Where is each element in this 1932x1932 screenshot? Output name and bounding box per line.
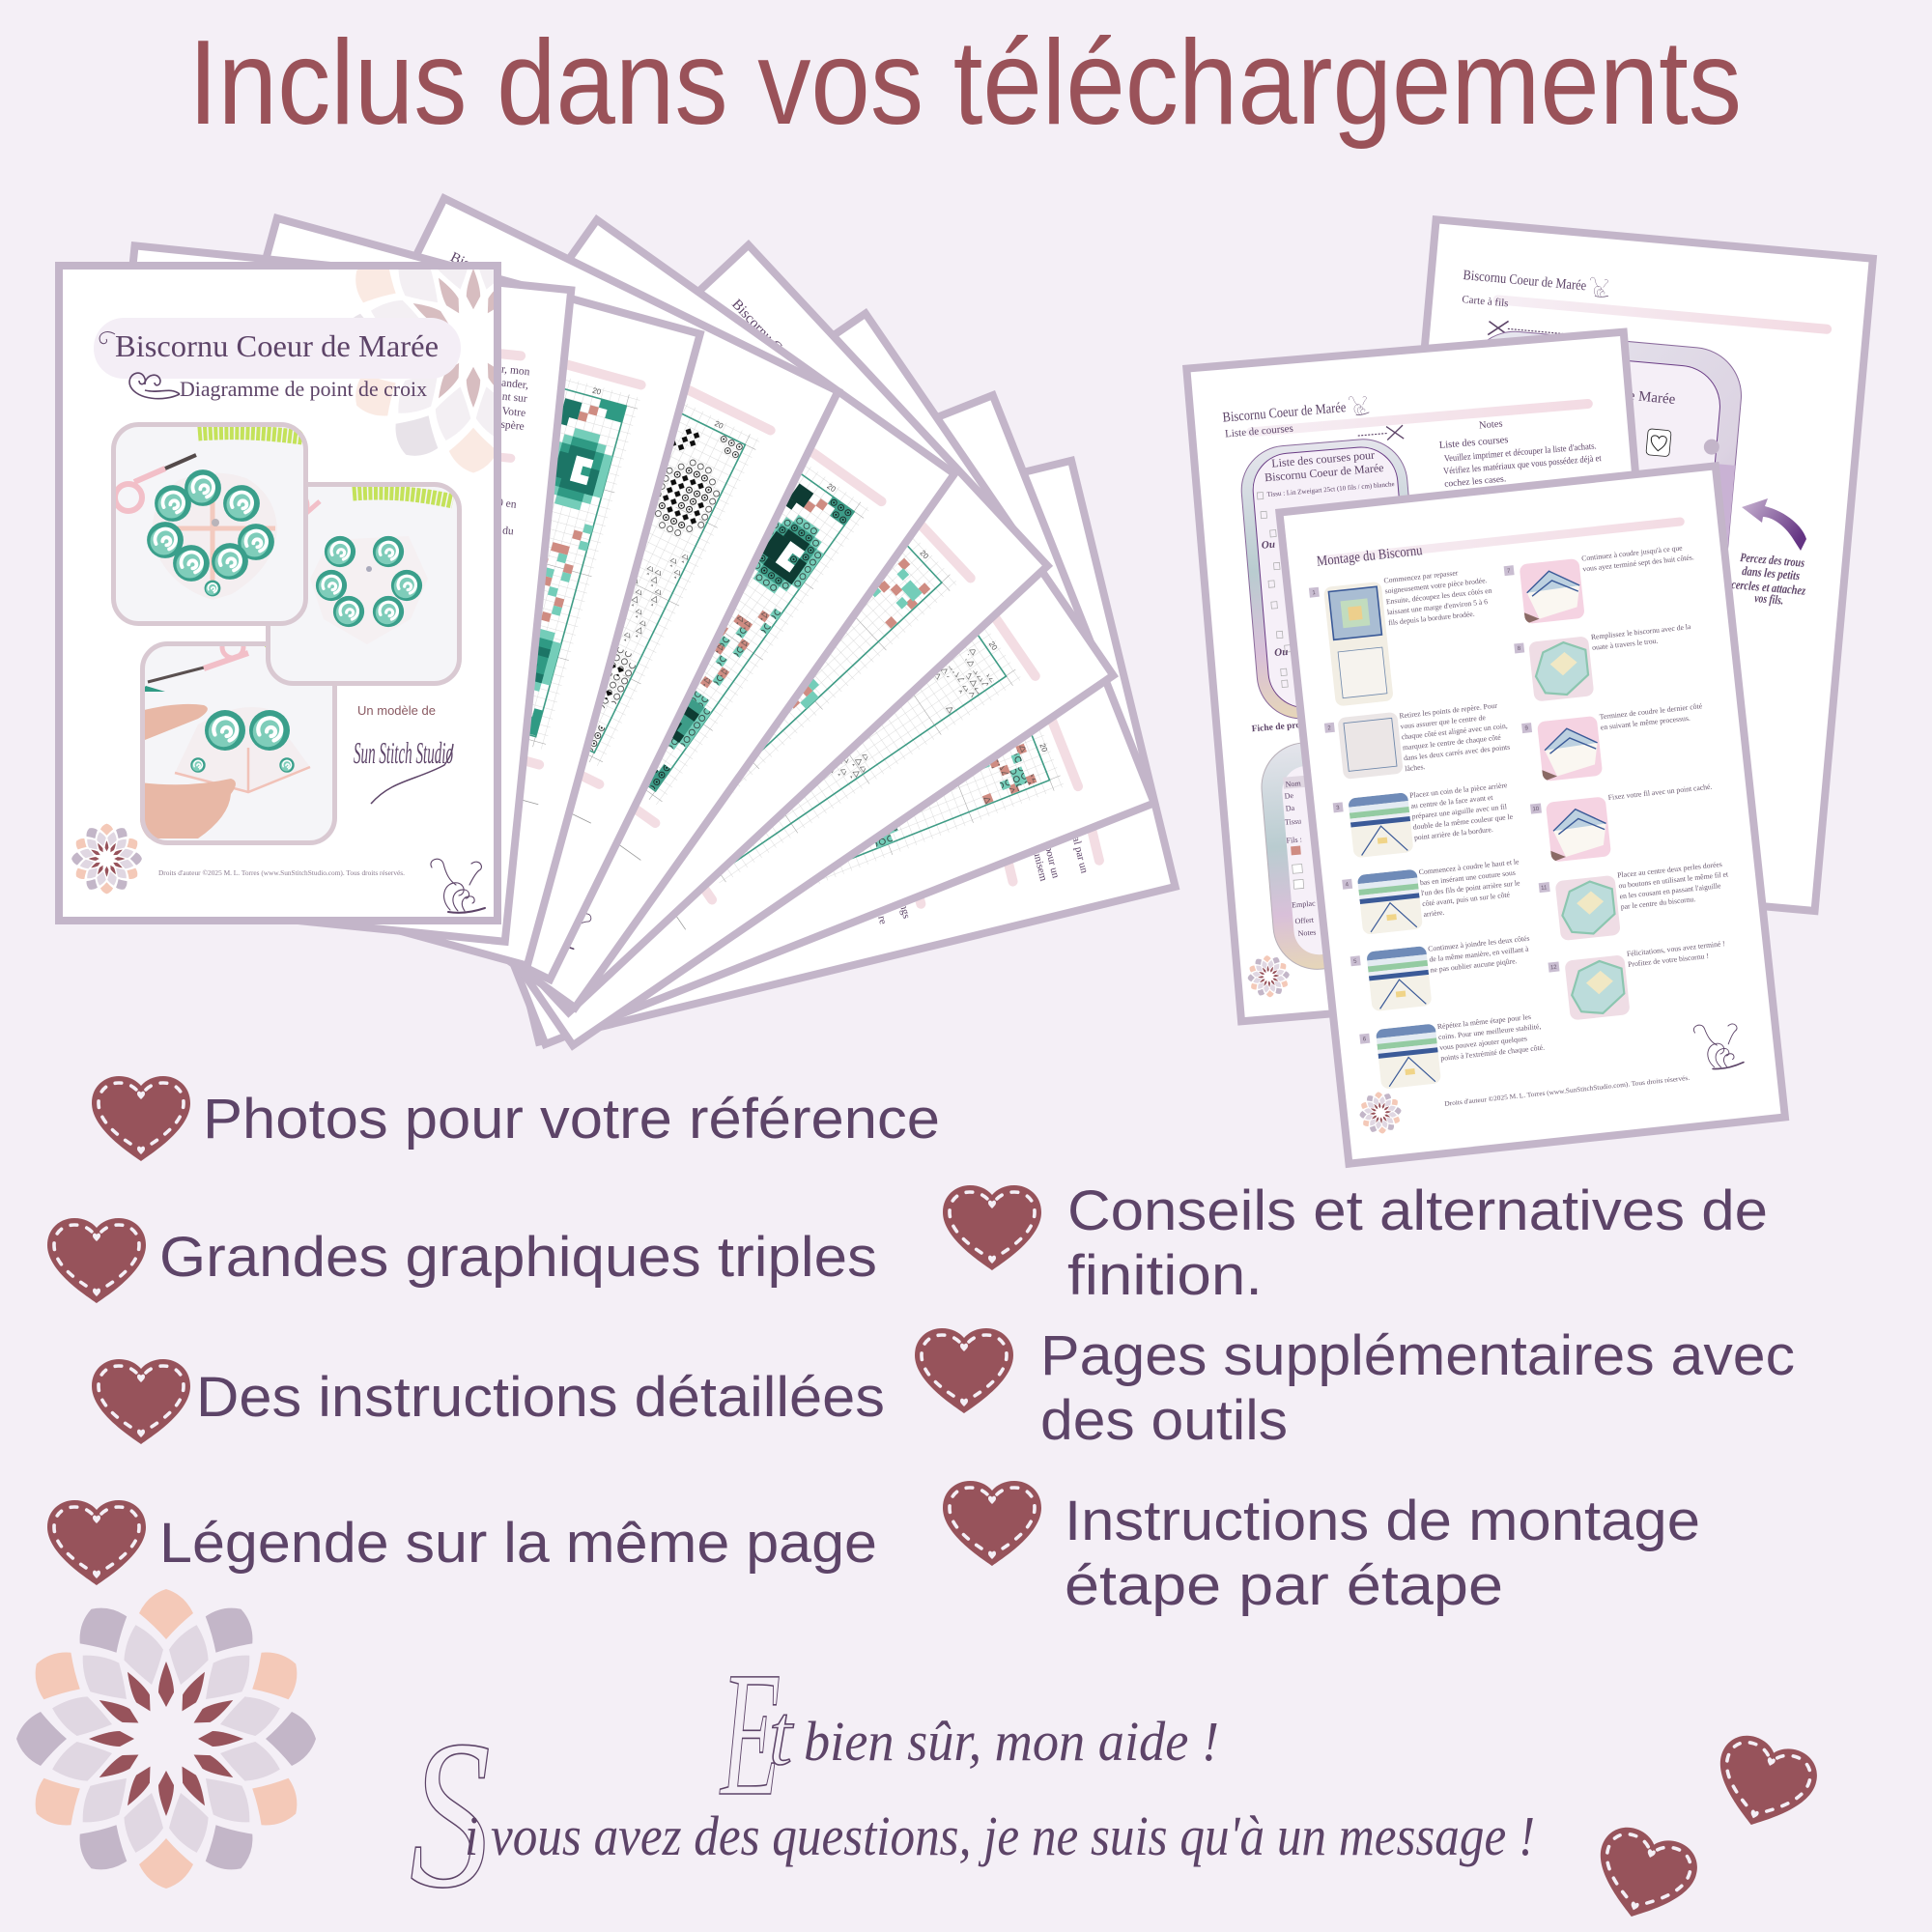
bullet: montage: Instructions de montage [1065,1490,1700,1552]
step 2: Retirez les points de repère. Pour [1399,701,1498,721]
step 9: en suivant le même processus. [1600,714,1690,731]
step 8: Remplissez le biscornu avec de la [1590,622,1691,641]
page 1: introduction text page: espère [496,418,525,433]
bullet: pages supplémentaires: Pages supplémentaires avec [1040,1324,1795,1387]
step 10 [1530,782,1719,864]
middle right page: liste de courses: cochez les cases. [1444,474,1507,490]
shopping list card [1238,436,1427,723]
page 1: introduction text page: du [502,525,515,538]
page mini mandala [1357,1090,1404,1136]
step 11: ou boutons en utilisant le même fil et [1618,869,1729,890]
page swirl logo [1693,1021,1744,1071]
middle right page: liste de courses: Biscornu Coeur de Marée [1222,400,1347,426]
step 10: 10 [1532,807,1540,812]
script line 1: E [719,1635,781,1833]
step 3: préparez une aiguille avec un fil [1411,802,1507,821]
step 3 [1332,781,1516,860]
step 4 [1342,857,1525,936]
shopping list card: Ou [1261,539,1275,552]
project sheet card: Emplac [1292,898,1316,909]
decorative heart lower [1584,1821,1704,1931]
step 5: ne pas oublier aucune piqûre. [1430,956,1518,975]
page 1: introduction text page: 0 en [497,497,517,511]
step 11: Placez au centre deux perles dorées [1617,860,1722,879]
step 1: Commencez par repasser [1383,568,1459,584]
script line 2: i vous avez des questions, je ne suis qu'à un message ! [465,1804,1535,1867]
step 6: vous pouvez ajouter quelques [1439,1034,1527,1052]
script line 2: S [410,1696,491,1932]
back right page: carte à fils: Carte à fils [1462,294,1509,309]
bullet: instructions: Des instructions détaillées [196,1366,885,1429]
middle right page: liste de courses: Veuillez imprimer et découper la liste d'achats. [1444,441,1597,465]
bullet: conseils [943,1179,1768,1307]
page 1: introduction text page: Votre [501,406,526,419]
step 1: fils depuis la bordure brodée. [1388,610,1475,627]
step 2: vous assurer que le centre de [1400,713,1487,730]
designer credit [354,703,453,804]
handwritten note: percez des trous: vos fils. [1754,590,1784,608]
middle right page: liste de courses: Notes [1479,418,1503,432]
step 9: 9 [1524,725,1529,732]
bullet: photos: Photos pour votre référence [203,1088,940,1151]
front right page: montage du biscornu [1279,466,1785,1164]
back right page: carte à fils [1378,219,1873,911]
step 11: en les cousant en passant l'aiguille [1619,881,1721,900]
title: Inclus dans vos téléchargements [188,16,1742,150]
step 1: laissant une marge d'environ 5 à 6 [1387,597,1489,616]
page 8: text page [435,461,1176,1041]
page 6: chart page [326,314,1113,1045]
handwritten note: percez des trous: dans les petits [1742,563,1801,582]
step 3: Placez un coin de la pièce arrière [1409,781,1508,800]
cover subtitle: Diagramme de point de croix [180,377,427,401]
step 7: vous ayez terminé sept des huit côtés. [1582,553,1694,573]
step 5: Continuez à joindre les deux côtés [1428,934,1530,953]
step 5: de la même manière, en veillant à [1429,945,1529,964]
back right page: carte à fils: Biscornu Coeur de Marée [1463,268,1587,294]
step 12 [1548,939,1731,1022]
step 6: coins. Pour une meilleure stabilité, [1438,1022,1542,1041]
page 4: chart page [217,220,954,1008]
fan of chart pages [69,198,1176,1045]
bullet: montage [943,1481,1700,1617]
page 1: introduction text page: nt sur [501,391,527,405]
step 1: soigneusement votre pièce brodée. [1384,576,1488,595]
bullet: grandes graphiques [47,1218,877,1303]
step 12: Félicitations, vous avez terminé ! [1627,939,1725,958]
page 1: introduction text page: nander, [496,377,529,391]
purple curved arrow [1742,498,1806,551]
page 1: introduction text page: r, mon [500,363,530,378]
decorative heart upper [1704,1729,1824,1839]
cover page: Sun Stitch Studio [354,735,453,770]
middle right page: liste de courses: Liste de courses [1225,423,1293,440]
designer credit: Un modèle de [357,703,436,718]
middle right page: liste de courses [1186,332,1678,1021]
page 8: text page: re [875,915,889,925]
step 5: 5 [1353,959,1358,965]
step 1 [1308,565,1502,708]
handwritten note: percez des trous: cercles et attachez [1731,577,1806,598]
page 3: chart page [156,198,838,980]
step 9: Terminez de coudre le dernier côté [1599,701,1703,722]
step 8 [1514,622,1697,703]
cover title pill: Biscornu Coeur de Marée [115,328,439,363]
bullet: légende [47,1500,877,1585]
middle right page: liste de courses: Vérifiez les matériaux que vous possédez déjà et [1443,453,1602,477]
bullet: montage: étape par étape [1065,1554,1503,1617]
step 6 [1359,1011,1548,1091]
project sheet card: Fils : [1286,835,1302,845]
page 8: text page: unisem [1031,850,1049,883]
cover watermark mandala [354,270,494,473]
cover title pill [94,318,461,379]
step 2: dans les deux carrés avec des points [1404,743,1511,762]
step 2: marquez le centre de chaque côté [1403,732,1502,752]
step 4: arrière. [1423,908,1445,919]
project sheet card: Da [1285,804,1295,813]
step 8: 8 [1518,646,1521,652]
shopping list card: Ou [1274,646,1289,659]
step 12: Profitez de votre biscornu ! [1628,952,1709,969]
step 8: ouate à travers le trou. [1592,637,1659,652]
step 3: point arrière de la bordure. [1413,825,1493,842]
handwritten note: percez des trous [1731,550,1806,608]
bullet: pages supplémentaires: des outils [1040,1389,1288,1452]
photo 2: biscornu front view [266,482,462,686]
page 8: text page: ngs [897,902,912,920]
script line 1 [719,1635,1219,1833]
page 8: text page: s pour un [1040,838,1062,880]
step 2: lâches. [1405,762,1426,773]
shopping list card: Tissu : Lin Zweigart 25ct (10 fils / cm) blanche [1266,480,1395,498]
project sheet card: De [1284,791,1294,801]
step 4: 4 [1345,882,1350,888]
middle right page: liste de courses: Fiche de projet [1251,720,1312,734]
project sheet card: Nom [1285,779,1302,789]
step 2: 2 [1327,725,1332,731]
step 7 [1503,542,1699,626]
step 9 [1521,701,1709,783]
photo 1: biscornu top view [111,422,308,626]
cover mini mandala [71,824,142,894]
shopping list card: Liste des courses pour [1271,448,1376,470]
project sheet card: Offert [1294,916,1315,925]
bullet: conseils: finition. [1067,1244,1263,1307]
step 3: double de la même couleur que le [1412,812,1514,832]
bullet: instructions [92,1359,885,1444]
page copyright: Droits d'auteur ©2025 M. L. Torres (www.SunStitchStudio.com). Tous droits réservés. [1444,1074,1690,1108]
step 1: 1 [1312,590,1317,596]
bullet: pages supplémentaires [915,1324,1795,1452]
handwritten note: percez des trous: Percez des trous [1740,550,1805,570]
page 5: chart page: Biscornu Coeur de Marée [728,297,841,416]
step 3: au centre de la face avant et [1410,793,1494,810]
section heading: Montage du Biscornu [1316,543,1424,570]
project sheet card: Notes [1297,928,1317,938]
page 8: text page: ntral par un [1067,824,1091,875]
back right page: carte à fils: pour faire des [1650,785,1709,803]
step 6: Répétez la même étape pour les [1436,1012,1531,1031]
middle right page: liste de courses: Liste des courses [1438,435,1509,451]
page 3: chart page: Biscornu Coeur de Marée [448,249,589,329]
step 4: Commencez à coudre le haut et le [1418,857,1520,876]
step 5 [1350,934,1536,1013]
step 11 [1538,859,1734,943]
cover page [55,262,501,924]
photo 3: biscornu in hand [140,637,337,845]
script line 2 [410,1696,1535,1932]
page 7: chart page [384,395,1154,1044]
step 1: Ensuite, découpez les deux côtés en [1385,586,1492,606]
bullet: légende: Légende sur la même page [159,1512,877,1575]
page 1: introduction text page [69,245,571,942]
cover copyright: Droits d'auteur ©2025 M. L. Torres (www.SunStitchStudio.com). Tous droits réservés. [158,870,405,877]
page 2: chart page [104,218,700,966]
bullet: grandes graphiques: Grandes graphiques triples [159,1226,877,1289]
back right page: carte à fils: Biscornu Coeur de Marée [1526,379,1676,408]
step 6: points à l'extrémité de chaque côté. [1440,1043,1545,1063]
step 11: par le centre du biscornu. [1620,895,1696,911]
project sheet card [1258,732,1445,973]
section heading [1316,515,1686,570]
step 2 [1323,700,1512,781]
step 4: l'un des fils de point arrière sur le [1421,878,1520,897]
bullet: conseils: Conseils et alternatives de [1067,1179,1768,1242]
step 2: chaque côté est aligné avec un coin, [1401,722,1508,741]
step 6: 6 [1363,1037,1367,1042]
step 11: 11 [1541,885,1548,892]
script line 1: t [769,1688,794,1783]
cover swirl logo [431,859,485,913]
step 7: 7 [1507,568,1512,575]
script line 1: bien sûr, mon aide ! [804,1710,1219,1773]
project sheet card: Tissu [1285,816,1301,827]
page 5: chart page [270,245,1047,1012]
step 12: 12 [1550,965,1558,971]
step 4: côté avant, puis un sur le côté [1422,890,1511,908]
step 7: Continuez à coudre jusqu'à ce que [1581,543,1684,563]
large mandala [16,1589,316,1889]
bullet: photos [92,1076,940,1161]
step 3: 3 [1336,806,1341,811]
step 10: Fixez votre fil avec un point caché. [1607,782,1713,802]
shopping list card: Biscornu Coeur de Marée [1264,461,1384,484]
step 4: bas en insérant une couture sous [1419,868,1516,887]
